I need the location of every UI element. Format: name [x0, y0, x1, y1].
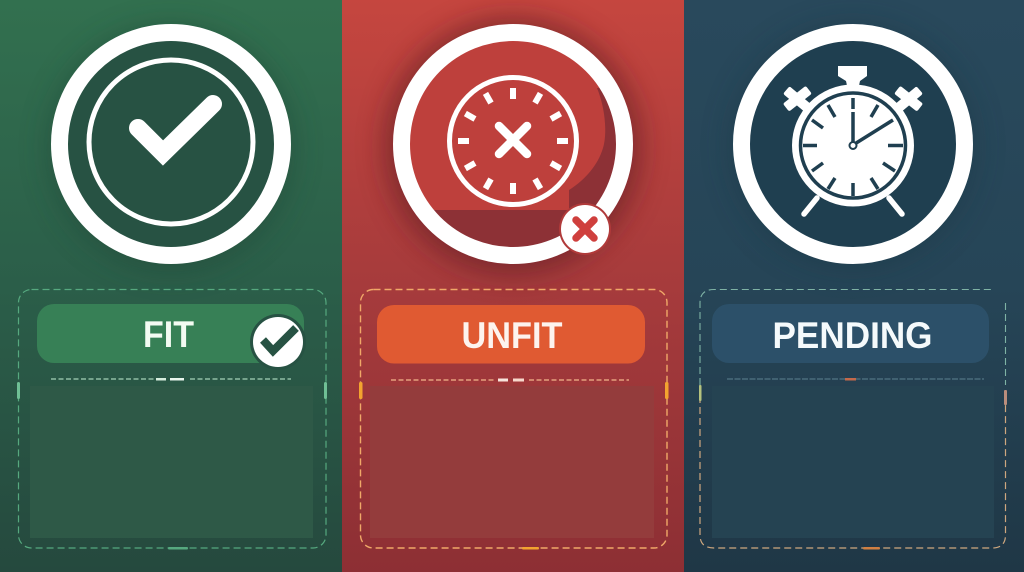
fit panel background [0, 0, 342, 572]
unfit label: UNFIT [462, 315, 563, 356]
pending dashed card outline [699, 290, 1007, 550]
fit divider [51, 378, 291, 380]
unfit label pill [377, 305, 645, 364]
unfit empty content box [370, 386, 654, 538]
unfit icon: clock with cross in ring [385, 18, 641, 274]
panel: unfit [342, 0, 684, 572]
pending icon: alarm clock in ring [729, 22, 977, 270]
unfit divider [391, 378, 629, 382]
fit dashed card outline [17, 290, 327, 550]
pending divider [727, 378, 984, 380]
fit label: FIT [143, 314, 194, 355]
panel: pending [684, 0, 1024, 572]
fit icon: check mark in double ring [47, 24, 295, 272]
unfit dashed card outline [359, 290, 668, 550]
pending label: PENDING [772, 315, 932, 356]
panel: fit [0, 0, 342, 572]
fit label pill [37, 304, 304, 363]
fit empty content box [30, 464, 313, 538]
unfit panel background [342, 0, 684, 572]
pending panel background [684, 0, 1024, 454]
fit badge: check [250, 314, 306, 370]
pending empty content box [712, 491, 994, 538]
pending label pill [712, 304, 989, 363]
